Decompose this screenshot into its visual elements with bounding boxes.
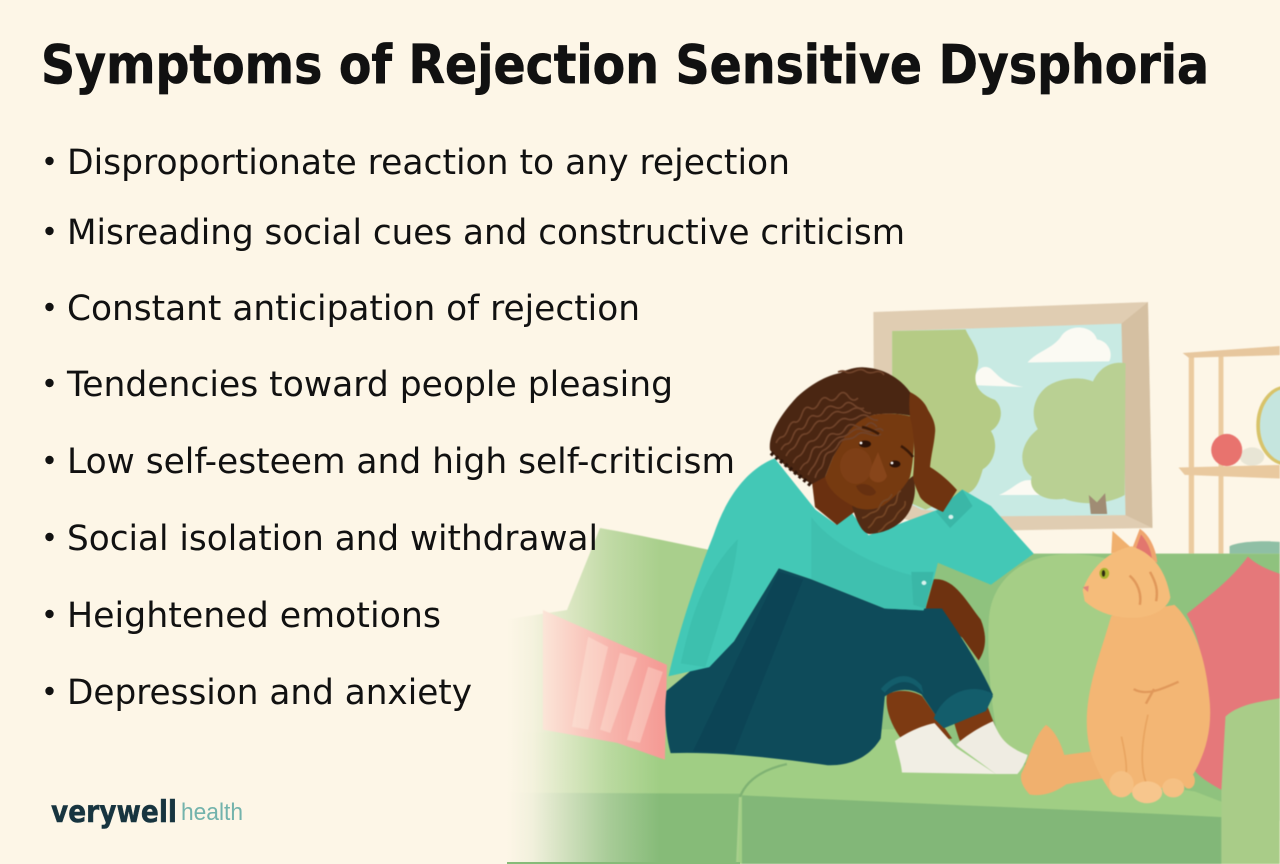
- couch lower edge: [507, 862, 740, 864]
- shins: [887, 691, 952, 744]
- pillow: right coral: [1187, 557, 1280, 790]
- couch: [505, 528, 1280, 864]
- logo: verywell health: health: [181, 799, 243, 826]
- knee and arm behind: [926, 579, 985, 660]
- symptom 5: Low self-esteem and high self-criticism: [67, 442, 735, 482]
- woman head: [770, 367, 957, 534]
- symptom 1: Disproportionate reaction to any rejection: [67, 143, 790, 183]
- lower hair strands: [862, 491, 905, 532]
- symptom 8: Depression and anxiety: [67, 673, 472, 713]
- upper hair: [770, 367, 912, 484]
- symptom list: [45, 143, 905, 713]
- pants: [665, 568, 993, 765]
- symptom 6: Social isolation and withdrawal: [67, 519, 598, 559]
- hair fringe: [771, 453, 813, 487]
- paws: [1109, 771, 1134, 797]
- shelf with mirror and ball: [1179, 346, 1280, 554]
- logo: verywell health: verywell: [51, 795, 177, 830]
- symptom 7: Heightened emotions: [67, 596, 441, 636]
- ears: [1111, 531, 1132, 554]
- window with trees: [873, 302, 1152, 531]
- symptom 2: Misreading social cues and constructive criticism: [67, 213, 905, 253]
- cat: [1021, 529, 1210, 803]
- shirt: [669, 458, 1034, 676]
- hair strands: [776, 370, 884, 478]
- head: [1083, 546, 1170, 618]
- pillow: left striped pink: [543, 610, 667, 760]
- left fade of illustration: [490, 500, 660, 864]
- tail: [1021, 725, 1111, 795]
- neck: [812, 470, 857, 525]
- facial features: [856, 427, 913, 496]
- lower hair: [852, 476, 915, 534]
- hand on head: [909, 392, 957, 512]
- cuffs: [936, 490, 973, 528]
- socks: [895, 723, 996, 774]
- symptom 4: Tendencies toward people pleasing: [66, 365, 673, 405]
- illustration: woman and cat on a couch: [505, 302, 1280, 864]
- body: [1087, 605, 1210, 795]
- woman body: [665, 458, 1034, 774]
- symptom 3: Constant anticipation of rejection: [67, 289, 640, 329]
- cheek highlight: [840, 448, 872, 484]
- face: [825, 414, 914, 509]
